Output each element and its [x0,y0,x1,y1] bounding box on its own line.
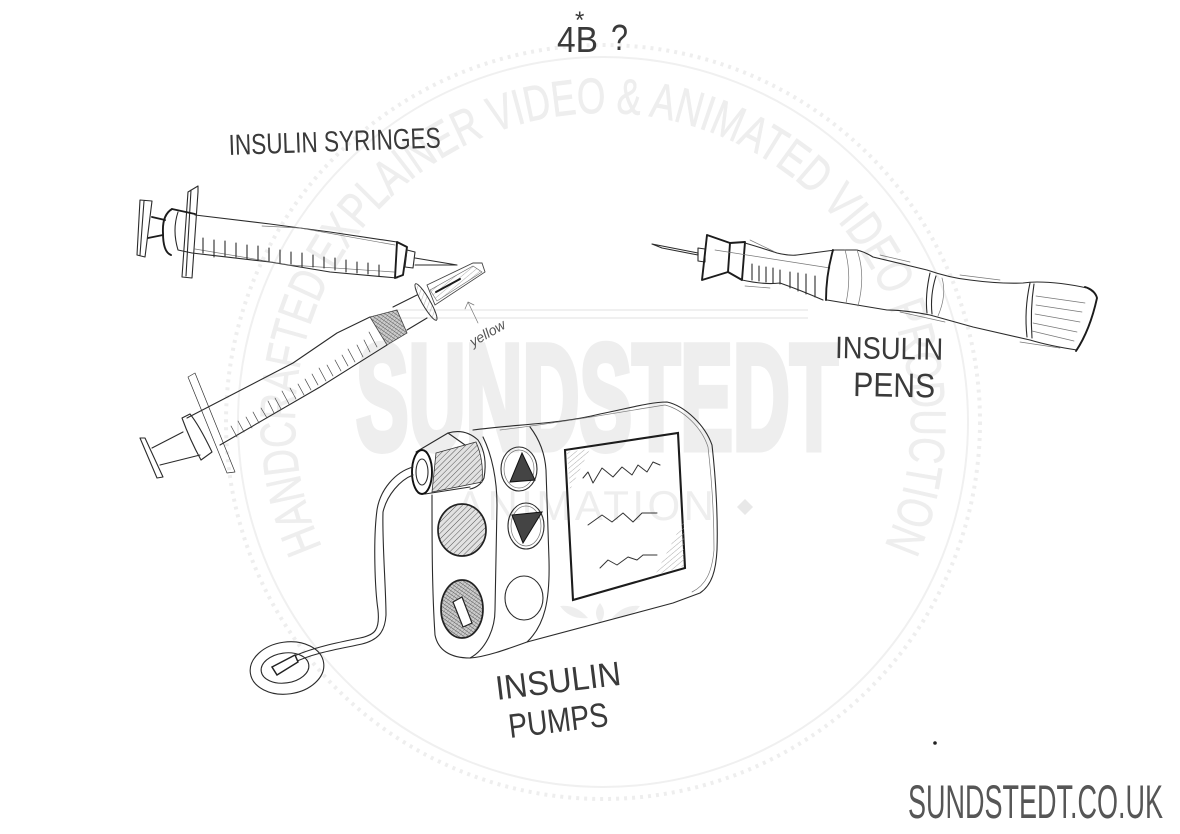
icon: upper syringe [137,186,457,278]
note: 4B? [557,7,628,60]
note: 4B?: * [575,7,584,34]
watermark leaves [560,603,640,623]
button: slot dial [441,580,483,638]
label: insulin pens [835,330,943,405]
icon: infusion site patch [247,637,327,699]
stray ink dot [933,741,937,745]
icon: insulin pump [412,402,717,658]
button: blank [505,576,543,620]
syringe scale ticks [231,332,377,437]
icon: infusion tube [290,467,413,663]
label: insulin pumps: INSULIN [493,655,623,708]
screen squiggle lines [583,462,660,568]
pen cap grip lines [1032,296,1085,341]
arrow: to yellow needle cap [465,302,478,323]
label: insulin pens: PENS [853,366,936,405]
note: 4B?: ? [611,17,628,58]
button: hatched round [438,504,486,556]
syringe scale ticks [203,238,379,276]
label: insulin pumps [493,655,623,746]
icon: insulin pen [652,235,1097,351]
pump screen [565,433,685,600]
label: insulin pens: INSULIN [835,330,943,367]
label: insulin pumps: PUMPS [506,696,610,746]
note: 4B?: 4B [557,19,598,60]
cartridge cylinder [412,432,485,494]
pump divider panels [470,427,549,658]
note: yellow: yellow [466,316,509,350]
button: down arrow [508,503,544,549]
watermark subtitle: ANIMATION [456,482,714,529]
watermark diamond [737,499,753,515]
label: insulin syringes: INSULIN SYRINGES [228,123,441,162]
watermark circular tagline: HANDCRAFTED EXPLAINER VIDEO & ANIMATED VIDEO PRODUCTION [260,78,946,558]
button: up arrow [501,447,537,491]
icon: lower syringe with capped needle [140,263,485,478]
watermark: Sundstedt badge [224,43,982,801]
